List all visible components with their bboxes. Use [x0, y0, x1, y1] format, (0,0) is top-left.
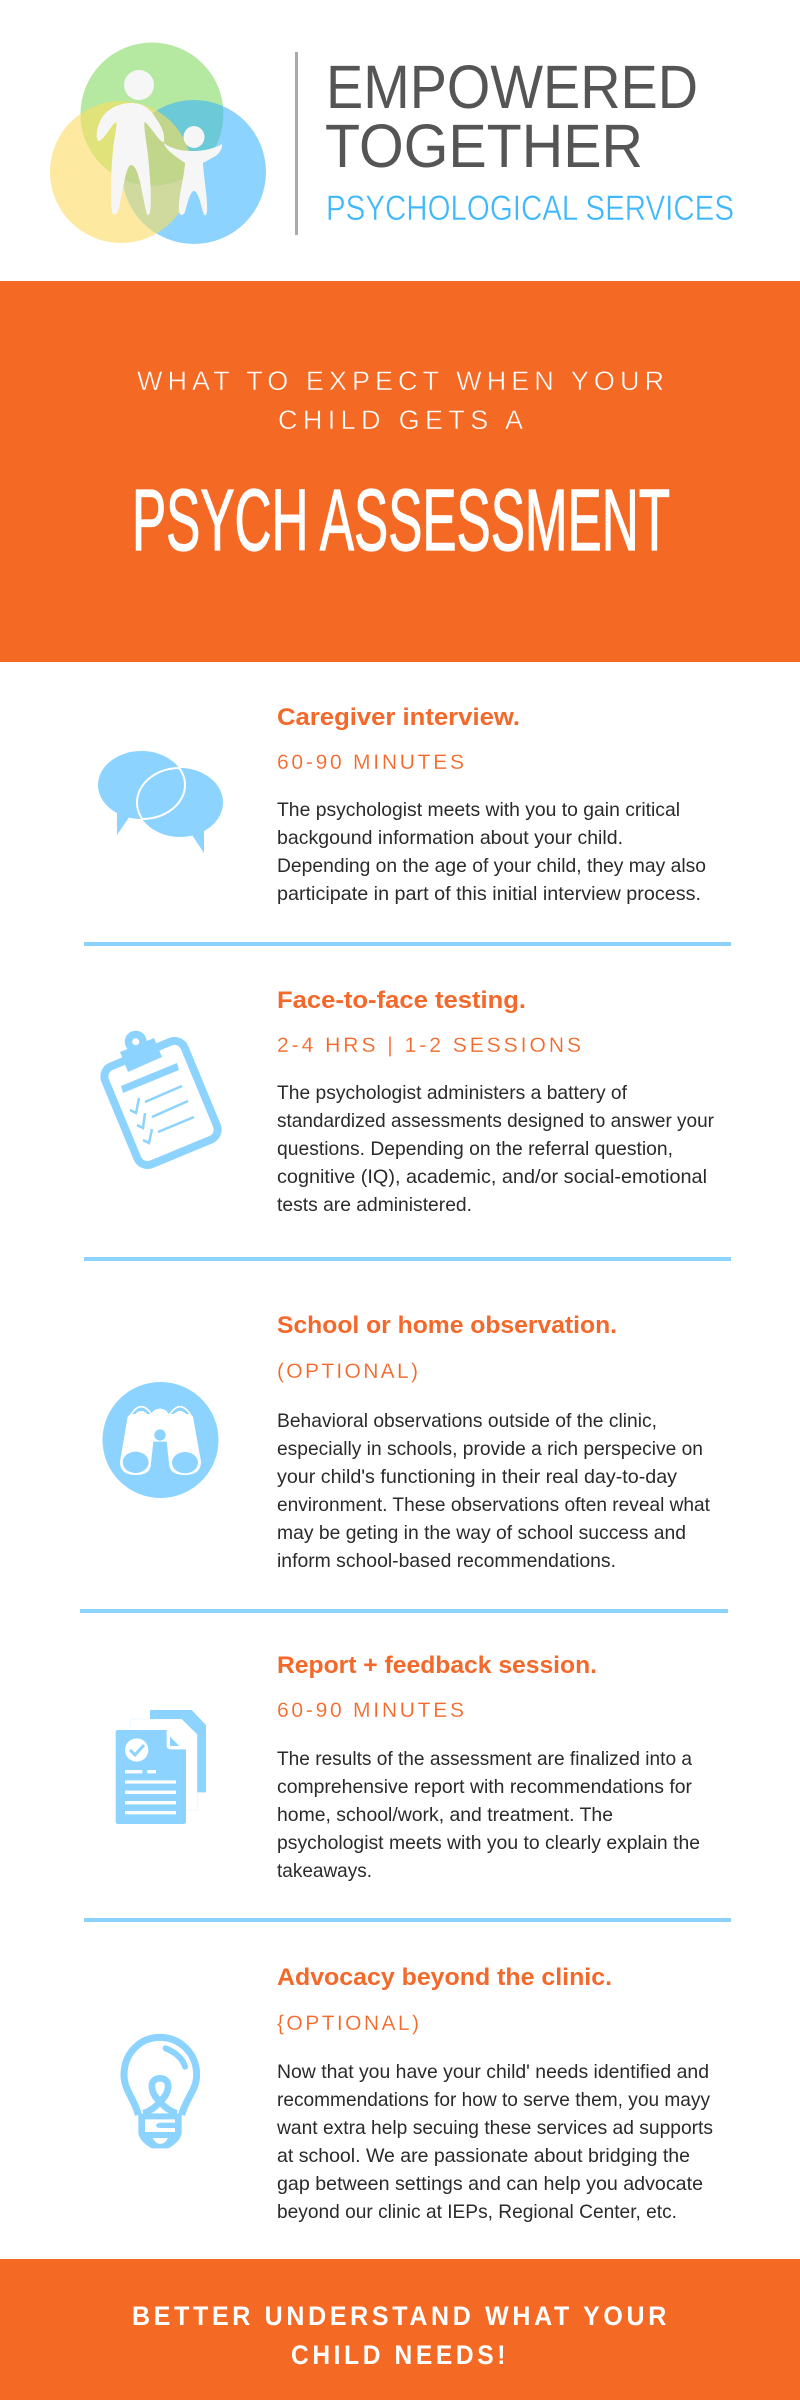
step 1: caregiver interview	[98, 704, 706, 905]
heading: Caregiver interview.	[277, 704, 520, 731]
description: Behavioral observations outside of the clinic,	[277, 1410, 657, 1432]
description: environment. These observations often reveal what	[277, 1494, 711, 1516]
heading: School or home observation.	[277, 1312, 617, 1339]
footer call to action: CHILD NEEDS!	[291, 2340, 509, 2370]
description: psychologist meets with you to clearly explain the	[277, 1832, 700, 1854]
duration: 60-90 MINUTES	[277, 751, 464, 774]
step 5: advocacy beyond the clinic	[124, 1964, 713, 2223]
description: especially in schools, provide a rich perspecive on	[277, 1438, 703, 1460]
logo mark: overlapping circles with parent and child	[50, 42, 266, 244]
footer banner	[0, 2259, 800, 2400]
step 4: report and feedback session	[116, 1652, 700, 1882]
logo wordmark: EMPOWERED	[326, 53, 698, 121]
description: inform school-based recommendations.	[277, 1550, 616, 1572]
icon: clipboard	[101, 1031, 221, 1168]
heading: Advocacy beyond the clinic.	[277, 1964, 612, 1991]
description: Depending on the age of your child, they may also	[277, 855, 706, 877]
icon: speech bubbles	[98, 751, 223, 853]
description: The psychologist meets with you to gain critical	[277, 799, 680, 821]
description: recommendations for how to serve them, you mayy	[277, 2089, 710, 2111]
optional tag: (OPTIONAL)	[277, 1360, 418, 1383]
description	[277, 1082, 714, 1216]
description: The results of the assessment are finalized into a	[277, 1748, 692, 1770]
description: home, school/work, and treatment. The	[277, 1804, 613, 1826]
description: The psychologist administers a battery of	[277, 1082, 628, 1104]
duration: 60-90 MINUTES	[277, 1699, 464, 1722]
header logo	[50, 42, 734, 244]
description	[277, 799, 706, 905]
description: beyond our clinic at IEPs, Regional Center, etc.	[277, 2201, 677, 2223]
description	[277, 1410, 711, 1572]
description: want extra help secuing these services ad supports	[276, 2117, 713, 2139]
heading: Report + feedback session.	[277, 1652, 597, 1679]
icon: documents	[116, 1710, 206, 1824]
description	[276, 2061, 713, 2223]
step 3: school or home observation	[102, 1312, 711, 1572]
logo wordmark	[325, 53, 734, 228]
footer call to action: BETTER UNDERSTAND WHAT YOUR	[132, 2301, 670, 2331]
description: takeaways.	[277, 1860, 372, 1882]
optional tag: {OPTIONAL)	[277, 2012, 419, 2035]
description: questions. Depending on the referral question,	[277, 1138, 673, 1160]
footer call to action	[132, 2301, 670, 2370]
logo wordmark: TOGETHER	[325, 112, 643, 180]
description: gap between settings and can help you advocate	[277, 2173, 703, 2195]
logo divider	[295, 52, 298, 235]
description: comprehensive report with recommendations for	[277, 1776, 692, 1798]
description: backgound information about your child.	[277, 827, 623, 849]
subtitle	[137, 366, 664, 435]
duration: 2-4 HRS | 1-2 SESSIONS	[277, 1034, 581, 1057]
step 2: face-to-face testing	[101, 987, 714, 1216]
icon: binoculars	[102, 1382, 218, 1498]
description: tests are administered.	[277, 1194, 472, 1216]
title banner	[0, 281, 800, 662]
description: Now that you have your child' needs identified and	[277, 2061, 709, 2083]
heading: Face-to-face testing.	[277, 987, 526, 1014]
description: standardized assessments designed to answer your	[277, 1110, 714, 1132]
description: at school. We are passionate about bridging the	[277, 2145, 690, 2167]
description: participate in part of this initial interview process.	[277, 883, 701, 905]
description	[277, 1748, 700, 1882]
description: your child's functioning in their real day-to-day	[277, 1466, 677, 1488]
logo wordmark: PSYCHOLOGICAL SERVICES	[326, 189, 734, 228]
subtitle: CHILD GETS A	[278, 405, 523, 435]
description: cognitive (IQ), academic, and/or social-emotional	[277, 1166, 707, 1188]
subtitle: WHAT TO EXPECT WHEN YOUR	[137, 366, 664, 396]
icon: light bulb	[124, 2037, 197, 2148]
description: may be geting in the way of school success and	[277, 1522, 686, 1544]
